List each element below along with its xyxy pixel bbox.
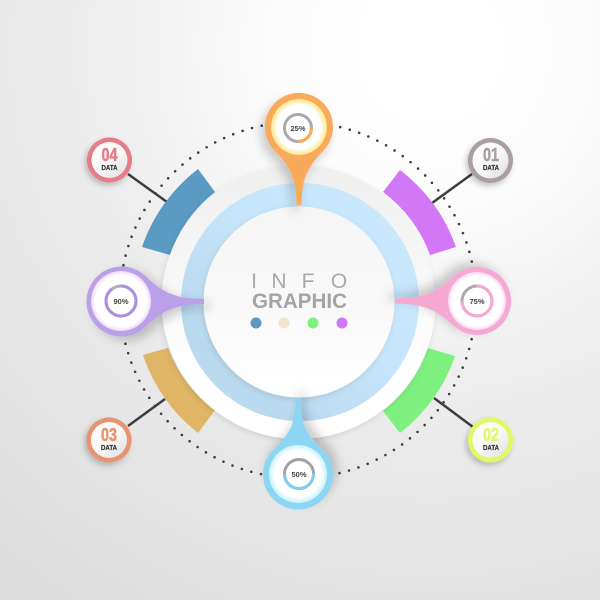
badge: 02: 02 <box>483 425 499 445</box>
outer white ring <box>162 165 436 439</box>
pin: 75% pink <box>395 267 511 335</box>
colour legend dots <box>250 318 348 328</box>
badge: 03 <box>86 418 132 462</box>
sector: blue <box>142 169 215 255</box>
pin: 50% blue: 50% <box>291 470 307 479</box>
badge: 03: DATA <box>101 445 117 452</box>
pin: 50% blue <box>263 398 333 509</box>
badge: 01: 01 <box>483 145 499 165</box>
connector lines <box>128 174 473 427</box>
blue ring <box>181 183 419 421</box>
badge: 02: DATA <box>483 445 499 452</box>
title line: INFO: O <box>331 270 347 293</box>
sector: green <box>383 348 455 433</box>
badge: 02 <box>468 418 513 462</box>
pin: 25% orange: 25% <box>290 124 306 133</box>
pin: 25% orange <box>265 93 333 205</box>
badge: 04 <box>87 138 132 182</box>
badge: 04: 04 <box>102 145 118 165</box>
title line: GRAPHIC: GRAPHIC <box>252 290 347 313</box>
pin: 90% purple: 90% <box>113 297 129 306</box>
title <box>251 270 347 313</box>
dotted orbit <box>120 122 476 478</box>
pin: 90% purple <box>87 266 204 336</box>
badge: 04: DATA <box>102 165 118 172</box>
title line: INFO: N <box>271 270 287 293</box>
sector: purple <box>383 170 456 255</box>
title line: INFO: F <box>302 270 314 293</box>
sector: tan <box>143 348 215 433</box>
pin: 75% pink: 75% <box>469 297 485 306</box>
badge: 03: 03 <box>101 425 117 445</box>
badge: 01: DATA <box>483 165 499 172</box>
title line: INFO <box>251 270 347 293</box>
central disc <box>162 165 436 439</box>
inner disc <box>204 206 394 398</box>
title line: INFO: I <box>251 270 257 293</box>
badge: 01 <box>468 138 513 183</box>
